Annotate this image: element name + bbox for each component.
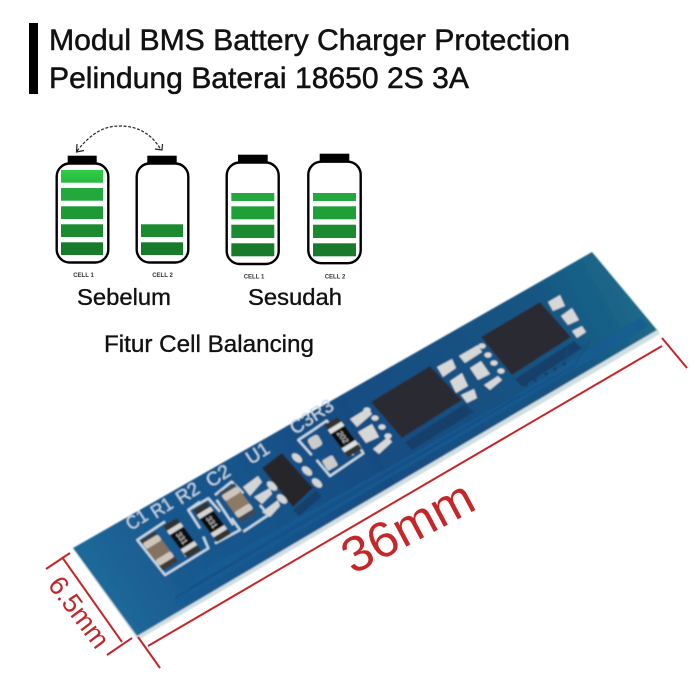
copper pour highlight (175, 318, 648, 604)
title line 2: Pelindung Baterai 18650 2S 3A (49, 62, 469, 95)
caption: cell balancing feature: Fitur Cell Balancing (104, 331, 314, 358)
label: cell 1 before: CELL 1 (73, 273, 94, 279)
dimension: 6.5mm width (46, 553, 132, 655)
resistor R2 (193, 502, 231, 542)
title accent bar (29, 23, 38, 94)
capacitor C1 (140, 531, 178, 571)
trace grooves (175, 340, 590, 598)
battery: after, cell 2 (308, 154, 361, 263)
silkscreen labels (122, 395, 338, 535)
left IC package (371, 366, 462, 438)
silkscreen labels: C3R3 (286, 395, 338, 439)
dimension label: 36mm: 36mm (332, 469, 484, 585)
label: cell 2 before: CELL 2 (152, 273, 173, 279)
label: cell 1 after: CELL 1 (244, 274, 265, 280)
board top surface (73, 252, 657, 636)
silkscreen outlines (137, 421, 363, 575)
dimension: 36mm length (138, 338, 687, 668)
battery: before, cell 1 (57, 156, 108, 262)
IC and chip shadows (293, 341, 582, 516)
arrow: charge transfer between cells (76, 126, 162, 152)
resistor R2: 331 (204, 515, 220, 530)
dimension label: 6.5mm: 6.5mm (42, 571, 116, 654)
test vias (524, 362, 566, 387)
resistor R1 (163, 518, 201, 558)
left IC pads and pins (350, 359, 477, 454)
title line 1: Modul BMS Battery Charger Protection (49, 24, 570, 57)
title block (29, 23, 570, 95)
capacitor C2 (219, 483, 257, 523)
resistor R3 (324, 417, 362, 457)
chip U1 (243, 451, 324, 517)
C3 solder pads (307, 434, 338, 471)
silkscreen labels: U1 (242, 439, 274, 469)
resistor R3: 202 (335, 430, 351, 445)
label: cell 2 after: CELL 2 (325, 274, 346, 280)
resistor R1: 331 (174, 531, 190, 546)
silkscreen labels: C1 (122, 506, 152, 535)
label: after: Sesudah (248, 284, 342, 310)
board substrate edge (73, 328, 660, 640)
battery: after, cell 1 (227, 155, 279, 264)
silkscreen labels: R1 (147, 494, 177, 523)
silkscreen labels: C2 (202, 461, 235, 492)
label: before: Sebelum (77, 284, 171, 310)
silkscreen labels: R2 (172, 479, 204, 509)
battery: before, cell 2 (137, 156, 188, 262)
photo: BMS circuit board (73, 252, 660, 640)
right IC package (481, 302, 571, 375)
right IC pads and pins (459, 295, 586, 390)
